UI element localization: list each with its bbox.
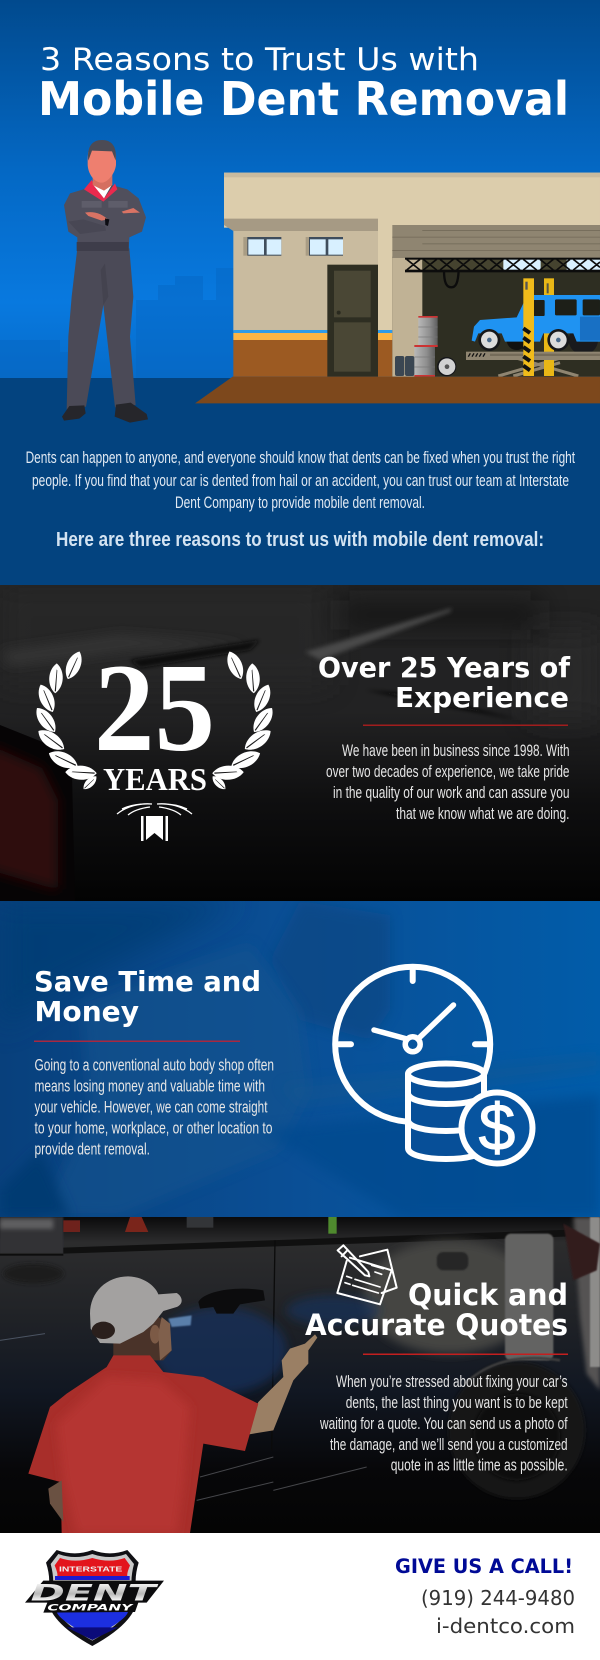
heading: quick and accurate quotes: Accurate Quotes [305,1308,568,1342]
arm [243,1334,317,1435]
upper car details [0,1217,600,1256]
right side lights [363,1217,600,1499]
red divider [363,724,568,726]
clock [335,967,490,1122]
number 25: 25 [94,639,215,778]
door panel details [0,1240,380,1500]
heading: save time and money [36,970,259,1027]
icon: note and pencil [337,1245,397,1304]
icon: clock and coins [335,967,532,1164]
sky background [0,0,600,378]
body text: quotes [319,1373,568,1474]
banner [25,1581,164,1613]
word company: COMPANY [47,1603,134,1613]
cap [90,1276,182,1344]
red divider [363,1354,568,1355]
contact details: GIVE US A CALL! [395,1555,573,1578]
laurel leaves [32,649,277,792]
body text: save time [34,1056,274,1158]
intro paragraph: Dent Company to provide mobile dent removal. [175,494,425,512]
blue truck [472,295,600,355]
collar and shirt [84,180,117,202]
windows [243,237,343,256]
heading: quick and accurate quotes: Quick and [408,1278,568,1312]
garage floor [195,377,600,403]
illustration: mechanic [62,140,148,423]
body text: save time: your vehicle. However, we can come straight [34,1098,268,1116]
heading: quick and accurate quotes [305,1282,567,1340]
body text: save time: provide dent removal. [34,1140,150,1158]
red shirt [28,1355,258,1533]
icon: 25 years wreath [32,639,277,841]
contact details [395,1555,575,1638]
boots [62,405,86,421]
heading: over 25 years [318,651,571,714]
ground and intro background [0,378,600,585]
word dent: DENT [31,1581,159,1606]
panel: footer [0,1533,600,1660]
heading: save time and money: Money [34,995,139,1028]
contact details: (919) 244-9480 [421,1586,575,1610]
contact details: i-dentco.com [436,1614,575,1638]
title line 2: Mobile Dent Removal [38,72,569,126]
footer background [0,1533,600,1660]
panel: save time and money [0,901,600,1217]
title line 1: 3 Reasons to Trust Us with [40,42,479,78]
heading: over 25 years: Experience [395,681,569,714]
photo background [0,901,600,1217]
roof truss [405,258,600,287]
legs [67,248,136,409]
torso and arms [64,185,146,251]
door [327,265,378,377]
photo: technician in red shirt [28,1276,317,1533]
body text: save time: Going to a conventional auto body shop often [34,1056,274,1074]
word years: YEARS [103,761,207,797]
body text: save time: to your home, workplace, or other location to [34,1120,272,1138]
heading: over 25 years: Over 25 Years of [318,651,571,684]
panel: quick and accurate quotes [0,1217,600,1533]
intro paragraph [26,449,575,512]
red divider [34,1040,240,1042]
dollar coin [462,1092,532,1164]
barrels and tires [395,316,456,377]
dollar sign: $ [479,1090,515,1164]
body text: save time: means losing money and valuable time with [34,1078,265,1096]
panel: hero header [0,0,600,585]
body text: experience [326,742,570,823]
lift [498,278,578,376]
lower arm shadow [48,1480,63,1522]
coin stack [408,1064,484,1160]
sprigs [117,804,192,815]
lift platform and post [466,278,600,376]
word interstate: INTERSTATE [59,1566,123,1573]
illustration: garage [195,173,600,403]
photo background [0,1217,600,1533]
logo: interstate dent company [25,1550,164,1646]
photo background [0,585,600,901]
neck and face [113,1314,172,1360]
face and hair [93,170,112,191]
ribbon [141,816,168,841]
city skyline silhouette [0,268,234,378]
heading: save time and money: Save Time and [34,965,261,998]
panel: over 25 years of experience [0,585,600,901]
garage opening [392,225,600,377]
